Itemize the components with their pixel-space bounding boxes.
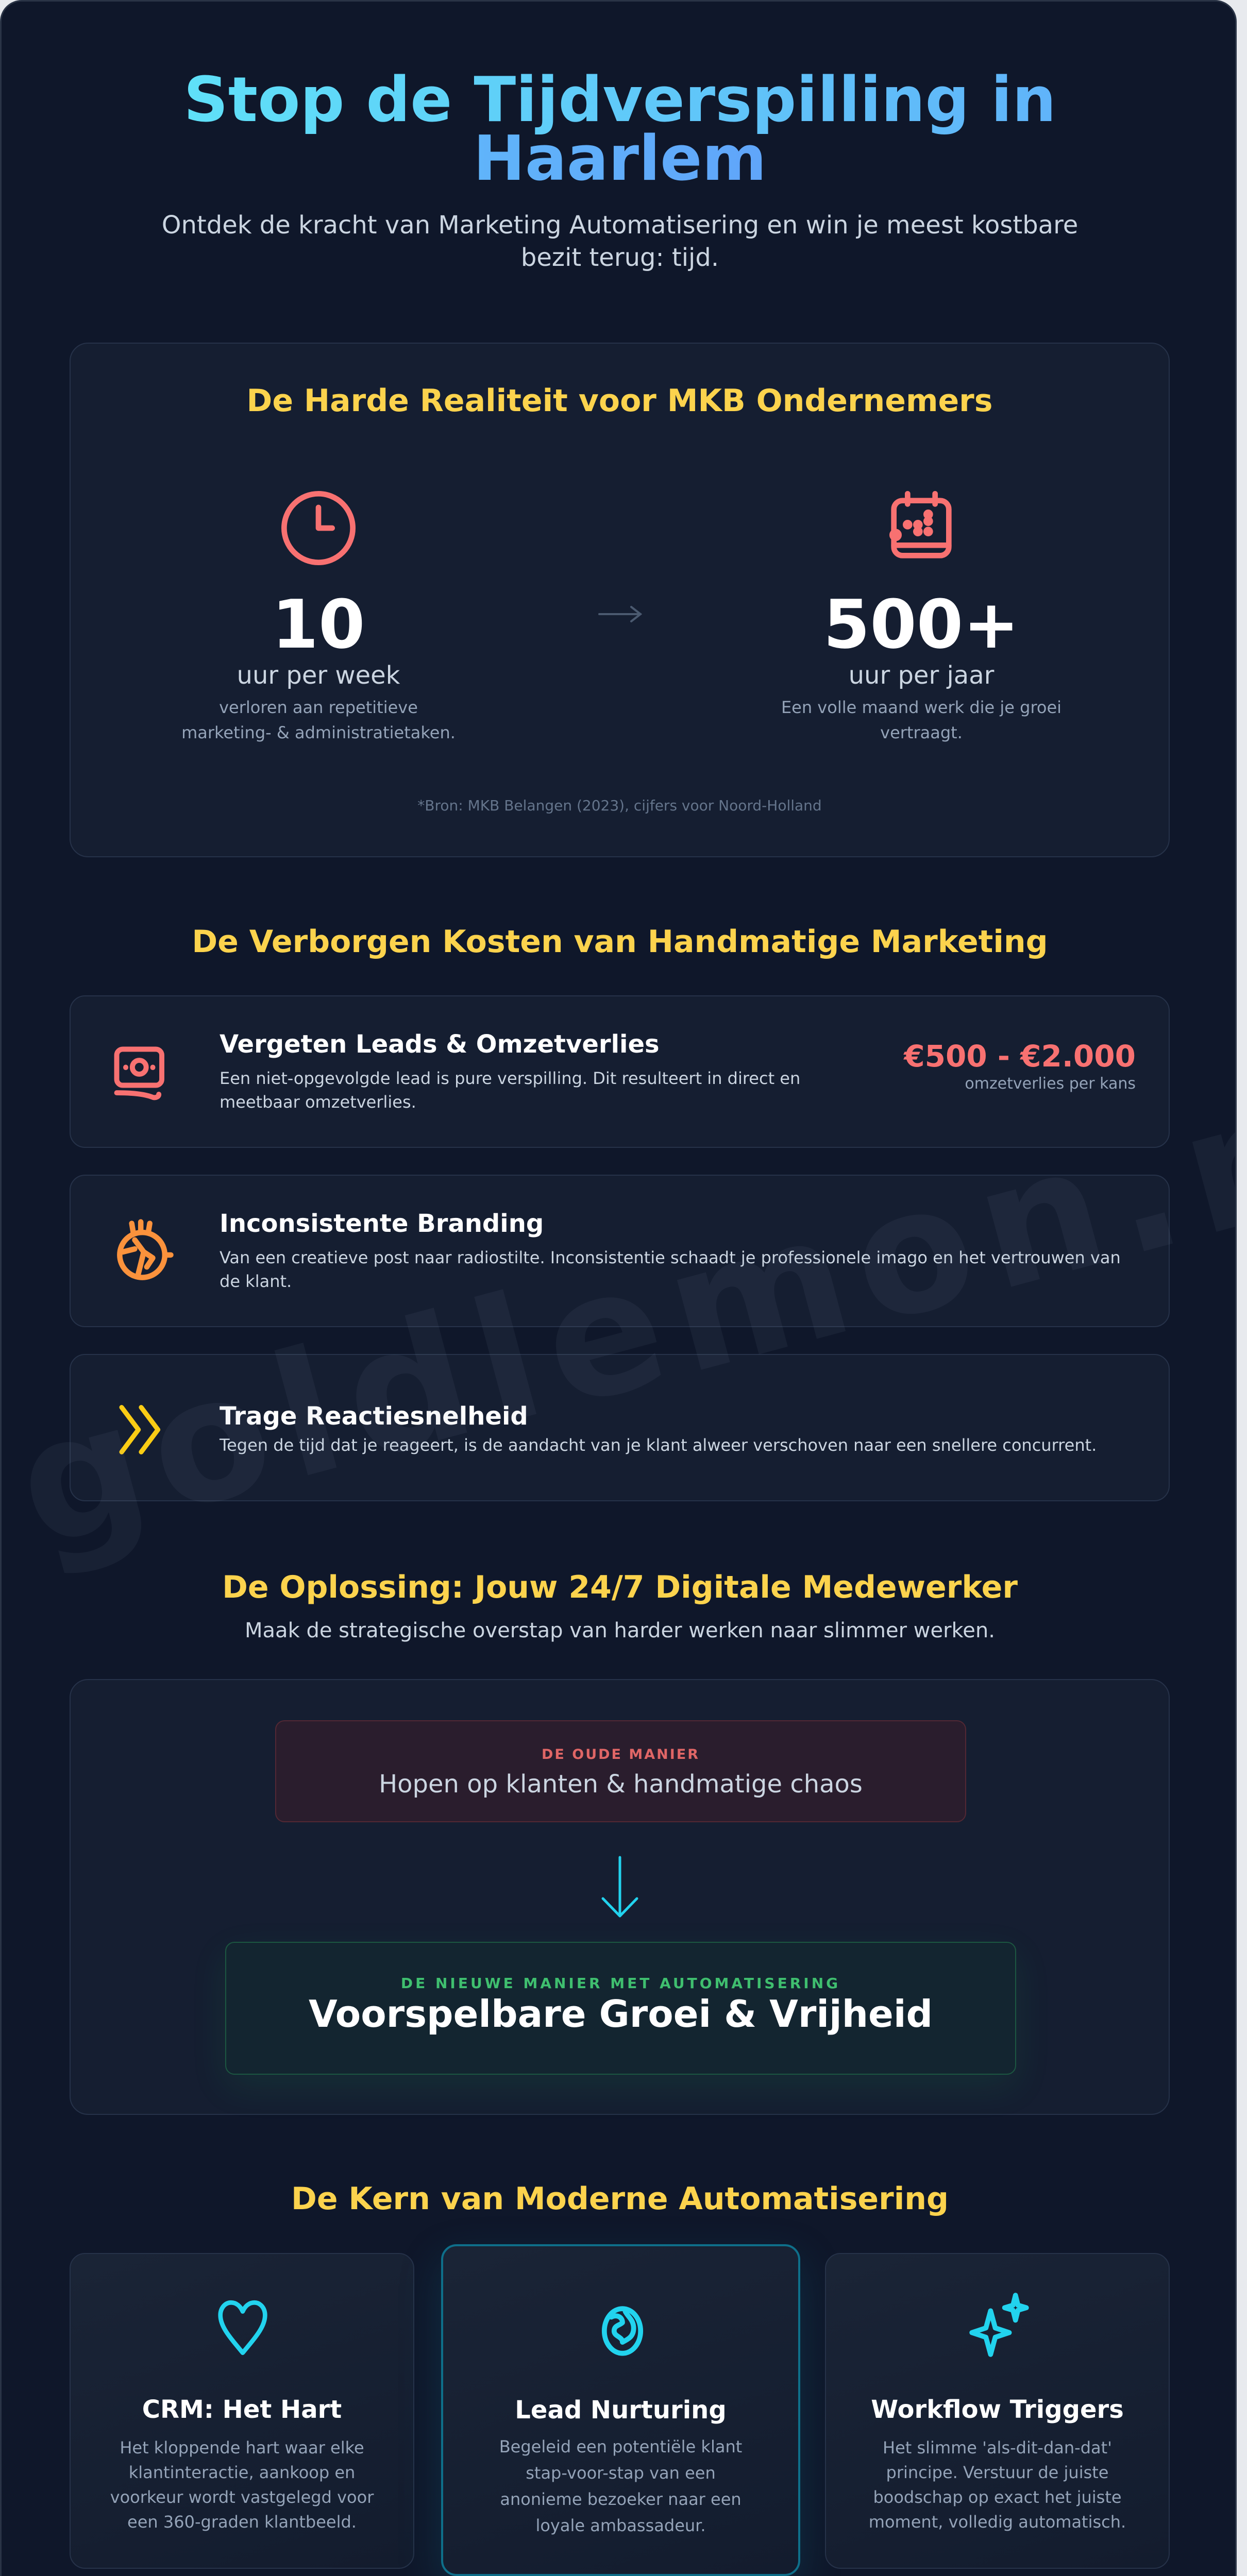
arrow bbox=[598, 606, 642, 622]
title: CRM: Het Hart bbox=[142, 2395, 342, 2424]
stat: omzetverlies: omzetverlies per kans bbox=[965, 1075, 1136, 1093]
title: Stop de Tijdverspilling in bbox=[183, 64, 1056, 136]
text bbox=[110, 2438, 374, 2532]
source: *Bron: MKB Belangen (2023), cijfers voor Noord-Holland bbox=[417, 797, 822, 814]
card: lead nurturing bbox=[441, 2244, 800, 2576]
stat: omzetverlies: €500 - €2.000 bbox=[904, 1039, 1136, 1074]
stat: 10 uur per week: 10 bbox=[272, 585, 365, 664]
box: oude manier bbox=[275, 1720, 966, 1822]
text bbox=[220, 1069, 800, 1112]
icon: chevrons bbox=[120, 1405, 161, 1454]
text bbox=[499, 2437, 742, 2535]
box: nieuwe manier bbox=[225, 1942, 1016, 2075]
box: oude manier: Hopen op klanten & handmatige chaos bbox=[379, 1770, 863, 1799]
title: Workflow Triggers bbox=[871, 2395, 1124, 2424]
card: workflow triggers bbox=[825, 2253, 1170, 2569]
text: Begeleid een potentiële klant bbox=[499, 2437, 742, 2456]
text: anonieme bezoeker naar een bbox=[500, 2489, 742, 2509]
icon: nurturing bbox=[602, 2306, 643, 2356]
icon: calendar bbox=[889, 491, 952, 558]
card: reactiesnelheid bbox=[70, 1354, 1170, 1501]
stat: 500+ uur per jaar: Een volle maand werk die je groei bbox=[781, 698, 1061, 717]
title: Vergeten Leads & Omzetverlies bbox=[220, 1030, 660, 1059]
subtitle: Ontdek de kracht van Marketing Automatisering en win je meest kostbare bbox=[162, 211, 1078, 240]
box: nieuwe manier: DE NIEUWE MANIER MET AUTOMATISERING bbox=[401, 1975, 840, 1992]
text: principe. Verstuur de juiste bbox=[886, 2463, 1108, 2482]
text: een 360-graden klantbeeld. bbox=[127, 2512, 357, 2532]
title bbox=[183, 64, 1056, 195]
text: boodschap op exact het juiste bbox=[873, 2487, 1122, 2507]
panel: oud vs nieuw bbox=[70, 1679, 1170, 2115]
icon: sparkles bbox=[969, 2293, 1029, 2357]
text: Het slimme 'als-dit-dan-dat' bbox=[883, 2438, 1112, 2458]
heading: oplossing: De Oplossing: Jouw 24/7 Digitale Medewerker bbox=[222, 1569, 1018, 1605]
title: Lead Nurturing bbox=[515, 2396, 727, 2425]
text: loyale ambassadeur. bbox=[535, 2516, 706, 2535]
icon: clock bbox=[281, 491, 356, 565]
heading: De Harde Realiteit voor MKB Ondernemers bbox=[247, 383, 992, 419]
text: Een niet-opgevolgde lead is pure verspilling. Dit resulteert in direct en bbox=[220, 1069, 800, 1088]
stat: 10 uur per week: verloren aan repetitieve bbox=[219, 698, 418, 717]
text: Van een creatieve post naar radiostilte. Inconsistentie schaadt je professionele imago en het vertrouwen van bbox=[220, 1248, 1121, 1267]
card: vergeten leads bbox=[70, 995, 1170, 1148]
text: klantinteractie, aankoop en bbox=[129, 2463, 355, 2482]
subtitle bbox=[162, 211, 1078, 272]
stat: 500+ uur per jaar: uur per jaar bbox=[849, 661, 994, 690]
stat: omzetverlies bbox=[903, 1039, 1136, 1093]
text: voorkeur wordt vastgelegd voor bbox=[110, 2487, 374, 2507]
text: stap-voor-stap van een bbox=[526, 2463, 716, 2483]
box: oude manier: DE OUDE MANIER bbox=[542, 1747, 700, 1762]
text: meetbaar omzetverlies. bbox=[220, 1092, 416, 1112]
text bbox=[869, 2438, 1126, 2532]
text: Het kloppende hart waar elke bbox=[120, 2438, 364, 2458]
icon: heart bbox=[218, 2300, 267, 2355]
subtitle: bezit terug: tijd. bbox=[521, 243, 719, 272]
card: crm bbox=[70, 2253, 414, 2569]
stat: 10 uur per week bbox=[181, 585, 456, 742]
stat: 10 uur per week: marketing- & administratietaken. bbox=[181, 723, 456, 742]
title: Haarlem bbox=[473, 123, 767, 195]
text bbox=[220, 1248, 1121, 1291]
text: Tegen de tijd dat je reageert, is de aandacht van je klant alweer verschoven naar een snellere concurrent. bbox=[220, 1435, 1097, 1455]
text: de klant. bbox=[220, 1272, 292, 1291]
subheading: Maak de strategische overstap van harder werken naar slimmer werken. bbox=[245, 1619, 995, 1642]
stat: 500+ uur per jaar bbox=[781, 585, 1061, 742]
stat: 500+ uur per jaar: 500+ bbox=[823, 585, 1019, 664]
arrow: down bbox=[602, 1856, 638, 1918]
heading: kern: De Kern van Moderne Automatisering bbox=[291, 2181, 949, 2217]
title: Inconsistente Branding bbox=[220, 1209, 544, 1238]
title: Trage Reactiesnelheid bbox=[220, 1402, 528, 1431]
icon: branding bbox=[117, 1219, 174, 1280]
card: branding bbox=[70, 1175, 1170, 1327]
icon: banknote bbox=[114, 1047, 164, 1100]
stat: 500+ uur per jaar: vertraagt. bbox=[880, 723, 963, 742]
panel: harde realiteit bbox=[70, 343, 1170, 857]
box: nieuwe manier: Voorspelbare Groei & Vrijheid bbox=[309, 1992, 933, 2036]
stat: 10 uur per week: uur per week bbox=[237, 661, 400, 690]
heading: verborgen kosten: De Verborgen Kosten van Handmatige Marketing bbox=[192, 924, 1048, 960]
text: moment, volledig automatisch. bbox=[869, 2512, 1126, 2532]
